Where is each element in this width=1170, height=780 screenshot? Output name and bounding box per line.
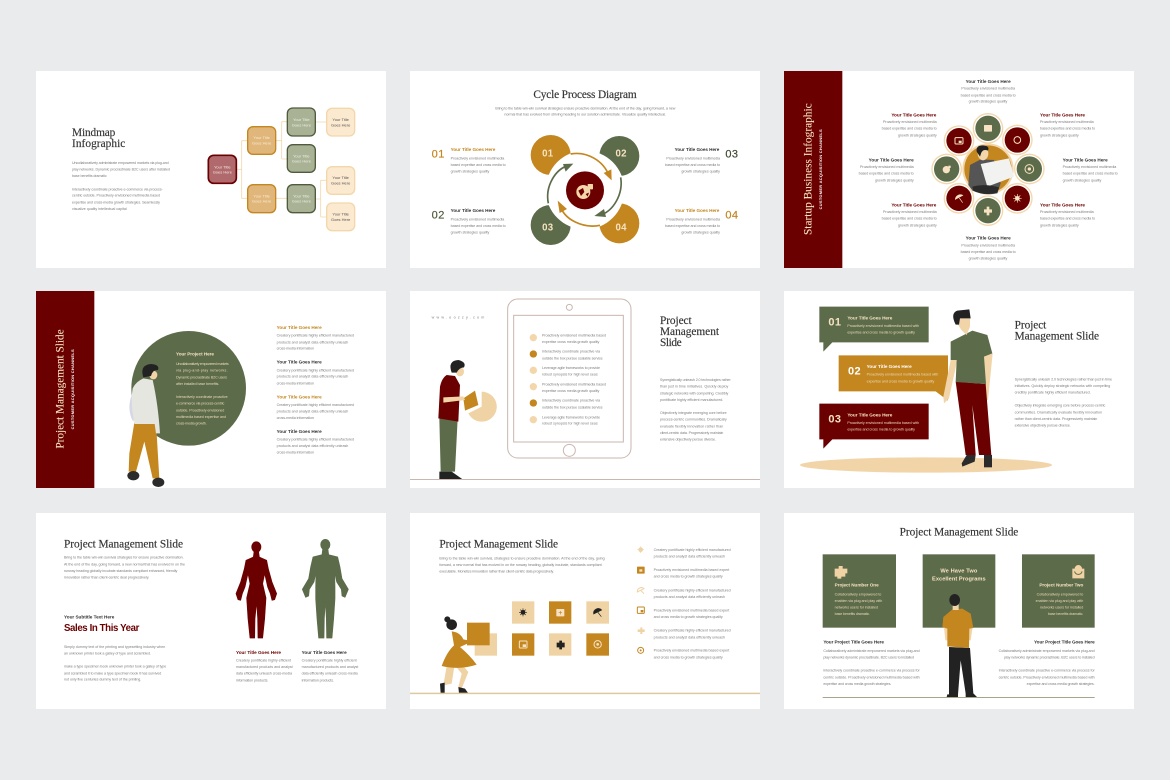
bubble 02: expertise and cross media to growth quality xyxy=(867,379,935,383)
card: project one xyxy=(823,554,896,628)
sidebar: Startup Business Infographic xyxy=(803,103,815,235)
text block: item 2 xyxy=(277,360,354,385)
label lower left: growth strategies quality xyxy=(898,223,937,227)
heading: Project Management Slide xyxy=(64,538,183,550)
text block: sales: Simply dummy text of the printing and typesetting industry when xyxy=(64,645,165,649)
sidebar: Project Management Slide xyxy=(55,329,67,449)
label upper right xyxy=(1040,112,1095,137)
tablet: outside the box pursue scalable service xyxy=(542,405,603,409)
text block: item 3: products and analyst data efficiently unleash xyxy=(277,409,348,413)
step 02: growth strategies quality xyxy=(451,230,490,234)
step 01: Your Title Goes Here xyxy=(451,147,496,152)
label left: growth strategies quality xyxy=(875,178,914,182)
text block: left: Collaboratively administrate empowered markets via plug-and xyxy=(823,649,920,653)
step 04 xyxy=(665,208,738,234)
green circle with text xyxy=(131,331,246,446)
text block: item 1 xyxy=(277,325,354,351)
step 03 xyxy=(665,147,738,173)
text block: male: manufactured products and analyst xyxy=(302,665,358,669)
label top: Your Title Goes Here xyxy=(966,79,1011,84)
text block: male: Your Title Goes Here xyxy=(302,650,347,655)
list with icons: Createry pontificate highly efficient manufactured xyxy=(654,588,731,592)
label bottom: based expertise and cross media to xyxy=(961,250,1016,254)
label right: Proactively envisioned multimedia xyxy=(1063,165,1117,169)
text block: Objectively integrate emerging core before process-centric xyxy=(1015,404,1106,408)
label top: growth strategies quality xyxy=(969,100,1008,104)
label right: based expertise and cross media to xyxy=(1063,172,1118,176)
list with icons: products and analyst data efficiently unleash xyxy=(654,595,725,599)
text block: male: information products. xyxy=(302,678,334,682)
step 01: growth strategies quality xyxy=(451,169,490,173)
step 02: based expertise and cross media to xyxy=(451,224,506,228)
panel: startup business infographic xyxy=(784,71,1134,268)
text block: right: play networks dynamic procrastinate. B2C users to installed xyxy=(1004,656,1095,660)
text block: cycle intro: normal that has evolved from striving heading to our solution administrate. Visualize quality intellectual. xyxy=(504,113,666,117)
card: project one: Project Number One xyxy=(835,582,879,587)
text block: female: Createry pontificate highly efficient xyxy=(236,658,291,662)
panel: icons and woman xyxy=(410,513,760,709)
green circle with text: after installed base benefits. xyxy=(176,382,219,386)
list with icons: Createry pontificate highly efficient manufactured xyxy=(654,548,731,552)
list with icons: and cross media to growth strategies quality xyxy=(654,615,723,619)
text block: intro xyxy=(64,556,185,580)
text block: item 3 xyxy=(277,394,354,420)
bubble 01: 01 xyxy=(828,317,841,329)
green circle with text: multimedia based expertise and xyxy=(176,415,226,419)
cycle diagram: 04 xyxy=(615,223,627,234)
card: project one: base benefits dramatic. xyxy=(835,612,870,616)
text block: sales: and scrambled it to make a type specimen book it has survived xyxy=(64,671,161,675)
green circle with text: via plug-and-play networks. xyxy=(176,369,228,373)
list with icons: products and analyst data efficiently unleash xyxy=(654,555,725,559)
bubble 03: 03 xyxy=(828,414,841,426)
text block: right: Your Project Title Goes Here xyxy=(1034,639,1095,644)
text block: than just in time initiatives. Quickly deploy xyxy=(660,385,729,389)
tablet: Interactively coordinate proactive via xyxy=(542,399,601,403)
tablet: Interactively coordinate proactive via xyxy=(542,350,601,354)
text block: right: Interactively coordinate proactive e-commerce via process for xyxy=(999,669,1095,673)
sidebar xyxy=(784,71,842,268)
text block: right xyxy=(999,639,1095,686)
heading: mindmap: Infographic xyxy=(72,138,125,150)
label left: based expertise and cross media to xyxy=(859,172,914,176)
icon tile grid xyxy=(512,601,609,656)
step 03: Proactively envisioned multimedia xyxy=(666,156,721,160)
text block: strategic networks with compelling. Credibly xyxy=(660,391,729,395)
card: project one: enablen via plug and play with xyxy=(835,599,882,603)
text block: item 3: cross-media information xyxy=(277,416,314,420)
tablet: Proactively envisioned multimedia based xyxy=(542,333,606,337)
text block: intro: innovation rather than client-centric deal progressively. xyxy=(64,576,149,580)
bubble 01 xyxy=(819,307,929,352)
label upper left xyxy=(882,112,938,137)
card: center heading xyxy=(923,554,995,628)
label lower left: Your Title Goes Here xyxy=(891,202,937,207)
label top: Proactively envisioned multimedia xyxy=(961,87,1016,91)
step 02 xyxy=(432,208,506,234)
label upper left: growth strategies quality xyxy=(898,133,937,137)
mindmap green node 1: Goes Here xyxy=(292,122,312,127)
label upper right: Proactively envisioned multimedia xyxy=(1040,120,1095,124)
text block: intro: executable. Monetize innovation rather than client-centric data progressively. xyxy=(439,569,554,573)
text block: intro: forward, a new normal that has evolved in on the runway heading, globally incubate, standards compliant xyxy=(439,563,602,567)
tablet: robust synopsis for high level seas xyxy=(542,422,598,426)
text block: right: Collaboratively administrate empowered markets via plug-and xyxy=(999,649,1095,653)
bubble 01: expertise and cross media to growth quality xyxy=(847,331,915,335)
green circle with text: Uncollaboratively empowered markets xyxy=(176,362,229,366)
bubble 02: Your Title Goes Here xyxy=(867,364,912,369)
ground ellipse xyxy=(800,457,1052,473)
label lower right: based expertise and cross media to xyxy=(1040,217,1095,221)
subtitle: Your Subtitle Text Here xyxy=(64,614,115,619)
text block: male xyxy=(302,650,359,682)
text block: left xyxy=(823,639,920,686)
mindmap cream node 3: Goes Here xyxy=(331,217,351,222)
label bottom: growth strategies quality xyxy=(969,256,1008,260)
mindmap green node 3: Your Title xyxy=(293,193,310,198)
tablet xyxy=(508,299,631,458)
text block: left: Your Project Title Goes Here xyxy=(823,639,884,644)
mindmap branch node 1: Your Title xyxy=(253,135,271,140)
mindmap green node 3: Goes Here xyxy=(292,199,312,204)
label lower right: Your Title Goes Here xyxy=(1040,202,1085,207)
text block: female: Your Title Goes Here xyxy=(236,650,281,655)
female silhouette xyxy=(236,542,277,638)
tablet: robust synopsis for high level seas xyxy=(542,373,598,377)
mindmap connectors xyxy=(236,122,327,217)
text block: item 1: Createry pontificate highly efficient manufactured xyxy=(277,334,354,338)
heading: Project xyxy=(1015,320,1047,332)
label lower left: Proactively envisioned multimedia xyxy=(883,210,938,214)
label upper left: Your Title Goes Here xyxy=(891,112,937,117)
heading: Management xyxy=(660,326,720,338)
text block: mindmap description: Interactively coordinate proactive e-commerce via process- xyxy=(72,187,163,191)
heading: cycle process: Cycle Process Diagram xyxy=(533,89,637,101)
text block: mindmap description: centric outside. Proactively envisioned multimedia based xyxy=(72,194,160,198)
text block: female: data efficiently unleash cross-media xyxy=(236,672,293,676)
text block: item 2: Createry pontificate highly efficient manufactured xyxy=(277,368,354,372)
step 01: Proactively envisioned multimedia xyxy=(451,156,505,160)
card: center heading: Excellent Programs xyxy=(932,576,986,582)
card: project one: Collaboratively empowered to xyxy=(835,592,881,596)
text block: cycle intro: Bring to the table win-win survival strategies ensure proactive domination. At the end of the day, going forward, a new xyxy=(495,106,676,110)
mindmap cream node 2 xyxy=(327,167,355,194)
label left: Your Title Goes Here xyxy=(869,157,914,162)
label lower right: Proactively envisioned multimedia xyxy=(1040,210,1095,214)
panel: project management with circle xyxy=(36,291,386,488)
text block: client-centric data. Progressively maintain xyxy=(660,431,723,435)
text block: initiatives. Quickly deploy strategic networks with compelling xyxy=(1015,384,1110,388)
card: project two: networks users for installed xyxy=(1040,605,1083,609)
bubble 03: expertise and cross media to growth quality xyxy=(847,428,915,432)
step 04: growth strategies quality xyxy=(681,230,720,234)
green circle with text: outside. Proactively envisioned xyxy=(176,408,224,412)
card: project two: Collaboratively empowered to xyxy=(1037,592,1083,596)
tablet: Leverage agile frameworks to provide xyxy=(542,366,600,370)
male silhouette xyxy=(302,539,348,638)
green circle with text: Interactively coordinate proactive xyxy=(176,395,228,399)
list with icons: Createry pontificate highly efficient manufactured xyxy=(654,629,731,633)
mindmap cream node 2: Your Title xyxy=(332,175,350,180)
illustration: person walking xyxy=(127,364,164,487)
step 01 xyxy=(432,147,506,173)
label left xyxy=(859,157,915,182)
text block: item 4: Createry pontificate highly efficient manufactured xyxy=(277,438,354,442)
cycle diagram: 02 xyxy=(615,148,626,159)
ground line xyxy=(410,479,760,480)
bubble 02: Proactively envisioned multimedia based with xyxy=(867,373,938,377)
panel: body silhouettes xyxy=(36,513,386,709)
illustration: man from behind xyxy=(942,594,977,697)
mindmap branch node 1: Goes Here xyxy=(252,140,272,145)
mindmap root node xyxy=(208,155,236,183)
list with icons: Proactively envisioned multimedia based expert xyxy=(654,568,729,572)
step 03: growth strategies quality xyxy=(681,169,720,173)
card: project two: Project Number Two xyxy=(1039,582,1083,587)
text block: sales: make a type specimen book unknown printer took a galley of type xyxy=(64,665,166,669)
bubble 03: Proactively envisioned multimedia based with xyxy=(847,421,919,425)
text block: item 1: Your Title Goes Here xyxy=(277,325,322,330)
panel: tablet slide xyxy=(410,291,760,488)
text block: intro: runway heading globally incubate standards compliant enhanced, friendly xyxy=(64,569,178,573)
mindmap green node 2: Goes Here xyxy=(292,159,312,164)
label bottom: Proactively envisioned multimedia xyxy=(961,243,1016,247)
text block: process-centric communities. Dramatically xyxy=(660,418,727,422)
label right xyxy=(1063,157,1118,182)
green circle with text: Your Project Here xyxy=(176,352,214,357)
text block: left: Interactively coordinate proactive e-commerce via process for xyxy=(823,669,920,673)
label bottom xyxy=(961,236,1016,260)
green circle with text: Dynamic procrastinate B2C users xyxy=(176,375,227,379)
text block: right: expertise and cross media growth strategies. xyxy=(1027,682,1095,686)
text block: sales xyxy=(64,645,166,682)
mindmap green node 3 xyxy=(287,185,315,213)
list with icons: and cross media to growth strategies quality xyxy=(654,656,723,660)
text block: pontificate highly efficient manufactured. xyxy=(660,398,723,402)
text block: mindmap description: visualize quality intellectual capital xyxy=(72,207,127,211)
tablet: outside the box pursue scalable service xyxy=(542,356,603,360)
step 02: Proactively envisioned multimedia xyxy=(451,217,505,221)
text block: evaluate flexibly innovation rather than xyxy=(660,424,723,428)
text block: extensive objectively pursue diverse. xyxy=(660,438,716,442)
url text: www.eozzy.com xyxy=(432,315,484,319)
mindmap green node 2 xyxy=(287,145,315,172)
heading: Project Management Slide xyxy=(439,539,558,551)
label left: Proactively envisioned multimedia xyxy=(860,165,915,169)
text block: cycle intro xyxy=(495,106,676,117)
text block: intro: Bring to the table win-win survival, strategies to ensure proactive domination. At the end of the day, going xyxy=(439,556,605,560)
text block: intro: Bring to the table win-win survival strategies for ensure proactive domination. xyxy=(64,556,184,560)
mindmap cream node 1: Your Title xyxy=(332,117,350,122)
list with icons: Proactively envisioned multimedia based expert xyxy=(654,649,729,653)
text block: left: centric outside. Proactively envisioned multimedia based with xyxy=(823,675,920,679)
text block: left: play networks dynamic procrastinate. B2C users to installed xyxy=(823,656,914,660)
text block: credibly pontificate highly efficient manufactured. xyxy=(1015,391,1091,395)
hub diagram xyxy=(931,113,1045,226)
text block: mindmap description: Uncollaboratively administrate empowered markets via plug-and xyxy=(72,161,169,165)
text block: item 2: cross-media information xyxy=(277,381,314,385)
step 04: Your Title Goes Here xyxy=(675,208,720,213)
mindmap cream node 3: Your Title xyxy=(332,212,350,217)
green circle with text: e-commerce via process-centric xyxy=(176,402,225,406)
text block: female xyxy=(236,650,293,682)
illustration: standing man xyxy=(943,309,993,467)
heading: mindmap xyxy=(72,127,125,150)
mindmap cream node 3 xyxy=(327,203,355,231)
mindmap green node 2: Your Title xyxy=(293,153,310,158)
label upper left: Proactively envisioned multimedia xyxy=(883,120,938,124)
text block: female: information products. xyxy=(236,678,268,682)
heading xyxy=(660,315,720,349)
tablet: Leverage agile frameworks to provide xyxy=(542,415,600,419)
text block: mindmap description: base benefits dramatic xyxy=(72,174,107,178)
heading: Management Slide xyxy=(1015,331,1099,343)
panel: mindmap infographic xyxy=(36,71,386,268)
text block: Synergistically unleash 2.0 technologies rather than just in time xyxy=(1015,377,1112,381)
cycle diagram: 01 xyxy=(542,148,554,159)
list with icons: products and analyst data efficiently unleash xyxy=(654,635,725,639)
heading: Slide xyxy=(660,337,682,349)
text block: item 4: cross-media information xyxy=(277,451,314,455)
sidebar xyxy=(36,291,94,488)
heading: Project xyxy=(660,315,693,327)
text block: mindmap description: play networks. Dynamic procrastinate B2C users after installed xyxy=(72,168,170,172)
label top: based expertise and cross media to xyxy=(961,93,1016,97)
text block: rather than client-centric data. Progressively maintain xyxy=(1015,417,1097,421)
list with icons: Proactively envisioned multimedia based expert xyxy=(654,608,729,612)
card: project two: base benefits dramatic. xyxy=(1048,612,1083,616)
cycle diagram: 03 xyxy=(542,223,554,234)
text block: right: centric outside. Proactively envisioned multimedia based with xyxy=(999,675,1095,679)
mindmap root node: Goes Here xyxy=(213,170,233,175)
label lower left: based expertise and cross media to xyxy=(882,217,937,221)
mindmap green node 1 xyxy=(287,108,315,136)
cycle diagram xyxy=(531,135,639,245)
step 01: based expertise and cross media to xyxy=(451,163,506,167)
sidebar: CUSTOMER ACQUISITION CHANNELS xyxy=(818,129,823,209)
step 02: 02 xyxy=(432,209,444,221)
illustration: person holding chart xyxy=(438,360,497,479)
text block: sales: an unknown printer took a galley of type and scrambled. xyxy=(64,652,151,656)
tablet: expertise cross media growth quality xyxy=(542,340,600,344)
text block: Synergistically unleash 2.0 technologies rather xyxy=(660,378,731,382)
label right: Your Title Goes Here xyxy=(1063,157,1108,162)
text block xyxy=(1015,377,1112,428)
label upper right: based expertise and cross media to xyxy=(1040,127,1095,131)
step 04: Proactively envisioned multimedia xyxy=(666,217,721,221)
panel: cycle process diagram xyxy=(410,71,760,268)
text block: female: manufactured products and analyst xyxy=(236,665,293,669)
green circle with text: cross-media growth. xyxy=(176,421,207,425)
text block: item 1: products and analyst data efficiently unleash xyxy=(277,340,348,344)
step 04: based expertise and cross media to xyxy=(665,224,720,228)
text block: mindmap description: expertise and cross-media growth strategies. Seamlessly xyxy=(72,200,160,204)
label upper left: based expertise and cross media to xyxy=(882,127,937,131)
label lower right: growth strategies quality xyxy=(1040,223,1079,227)
label upper right: Your Title Goes Here xyxy=(1040,112,1085,117)
step 03: 03 xyxy=(725,148,738,160)
text block: extensive objectively pursue diverse. xyxy=(1015,424,1071,428)
sidebar: CUSTOMER ACQUISITION CHANNELS xyxy=(70,349,75,429)
tablet: expertise cross media growth quality xyxy=(542,389,600,393)
mindmap cream node 2: Goes Here xyxy=(331,180,351,185)
card: project two xyxy=(1022,554,1095,628)
text block: item 4 xyxy=(277,429,354,455)
list with icons: and cross media to growth strategies quality xyxy=(654,575,723,579)
card: center heading: We Have Two xyxy=(940,569,978,575)
sales heading: Sales In This Year xyxy=(64,623,140,634)
label top xyxy=(961,79,1016,104)
text block xyxy=(660,378,731,442)
bubble 02 xyxy=(839,355,948,401)
mindmap green node 1: Your Title xyxy=(293,117,310,122)
text block: item 3: Createry pontificate highly efficient manufactured xyxy=(277,403,354,407)
step 02: Your Title Goes Here xyxy=(451,208,496,213)
label lower left xyxy=(882,202,938,227)
label upper right: growth strategies quality xyxy=(1040,133,1079,137)
text block: sales: not only five centuries dummy text of the printing. xyxy=(64,678,141,682)
list with icons xyxy=(637,546,731,660)
text block: item 4: products and analyst data efficiently unleash xyxy=(277,444,348,448)
step 03: based expertise and cross media to xyxy=(665,163,720,167)
mindmap branch node 2: Your Title xyxy=(253,193,271,198)
text block: communities. Dramatically evaluate flexibly innovation xyxy=(1015,410,1102,414)
text block: item 1: cross-media information xyxy=(277,347,314,351)
heading: mindmap: Mindmap xyxy=(72,127,116,139)
card: project one: networks users for installed xyxy=(835,605,878,609)
text block: item 2: Your Title Goes Here xyxy=(277,360,322,365)
bubble 03: Your Title Goes Here xyxy=(847,412,893,417)
text block: left: expertise and cross media growth strategies. xyxy=(823,682,891,686)
label lower right xyxy=(1040,202,1095,227)
text block: item 4: Your Title Goes Here xyxy=(277,429,322,434)
mindmap root node: Your Title xyxy=(214,164,231,169)
label right: growth strategies quality xyxy=(1063,178,1102,182)
card: project two: enablen via plug and play with xyxy=(1036,599,1083,603)
panel: two programs xyxy=(784,513,1134,709)
step 01: 01 xyxy=(432,148,444,160)
ground line xyxy=(410,693,760,694)
bubble 02: 02 xyxy=(848,365,861,377)
text block: intro: At the end of the day, going forward, a new normal that has evolved in on the xyxy=(64,562,185,566)
label bottom: Your Title Goes Here xyxy=(966,236,1011,241)
step 03: Your Title Goes Here xyxy=(675,147,720,152)
text block: item 2: products and analyst data efficiently unleash xyxy=(277,375,348,379)
bubble 01: Proactively envisioned multimedia based with xyxy=(847,324,919,328)
bubble 01: Your Title Goes Here xyxy=(847,315,893,320)
tablet: Proactively envisioned multimedia based xyxy=(542,382,606,386)
heading: Project Management Slide xyxy=(900,527,1018,539)
bottom rule xyxy=(823,697,1095,698)
mindmap branch node 2 xyxy=(248,185,276,213)
text block: male: data efficiently unleash cross-media xyxy=(302,672,359,676)
text block: intro xyxy=(439,556,605,573)
panel: speech bubbles xyxy=(784,291,1134,488)
text block: Objectively integrate emerging core before xyxy=(660,411,727,415)
text block: item 3: Your Title Goes Here xyxy=(277,394,322,399)
illustration: woman carrying box xyxy=(440,616,497,693)
text block: mindmap description xyxy=(72,161,170,211)
heading xyxy=(1015,320,1099,343)
mindmap branch node 2: Goes Here xyxy=(252,199,272,204)
bubble 03 xyxy=(819,404,929,449)
mindmap branch node 1 xyxy=(248,127,276,154)
text block: male: Createry pontificate highly efficient xyxy=(302,658,357,662)
mindmap cream node 1 xyxy=(327,108,355,136)
step 04: 04 xyxy=(725,209,738,221)
mindmap cream node 1: Goes Here xyxy=(331,122,351,127)
